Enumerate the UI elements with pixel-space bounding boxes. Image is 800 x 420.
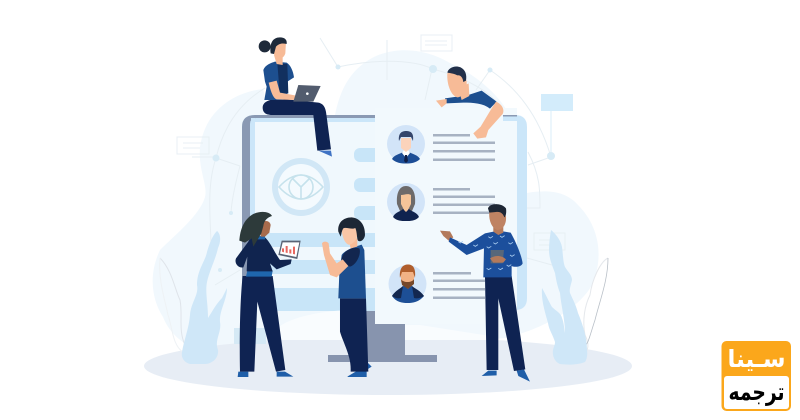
network node dots — [212, 64, 555, 272]
profile 1 — [387, 125, 495, 164]
profile 3 text lines — [433, 272, 485, 299]
profile 1 text lines — [433, 134, 495, 161]
person: woman sitting with laptop — [259, 37, 332, 157]
small floor box left — [234, 328, 266, 344]
profile 3 — [388, 264, 485, 303]
monitor — [234, 115, 527, 344]
network lines and nodes — [192, 38, 552, 360]
right plants — [542, 230, 608, 365]
avatar: woman — [387, 183, 425, 221]
logo badge — [722, 341, 791, 411]
left plants — [160, 231, 227, 364]
logo word top: سـینا — [728, 345, 786, 373]
person: man leaning over sheet — [436, 66, 503, 139]
avatar: bearded man — [388, 264, 426, 303]
monitor stand — [328, 305, 437, 362]
profile 2 text lines — [433, 188, 495, 214]
person: man in patterned sweater — [440, 204, 530, 382]
profile 2 — [387, 183, 495, 221]
screen bottom white base — [280, 310, 366, 340]
person: man in centre — [322, 217, 372, 377]
profile sheet — [375, 108, 517, 324]
floor shadow — [144, 337, 632, 395]
floating note cards — [177, 35, 565, 250]
screen menu bars — [263, 148, 384, 311]
background blobs — [153, 50, 599, 352]
logo: eye emblem — [272, 158, 330, 216]
avatar: man in suit — [387, 125, 425, 164]
floating blue label — [541, 94, 573, 152]
person: woman with tablet — [235, 212, 301, 377]
logo word bottom: ترجمه — [728, 378, 784, 406]
